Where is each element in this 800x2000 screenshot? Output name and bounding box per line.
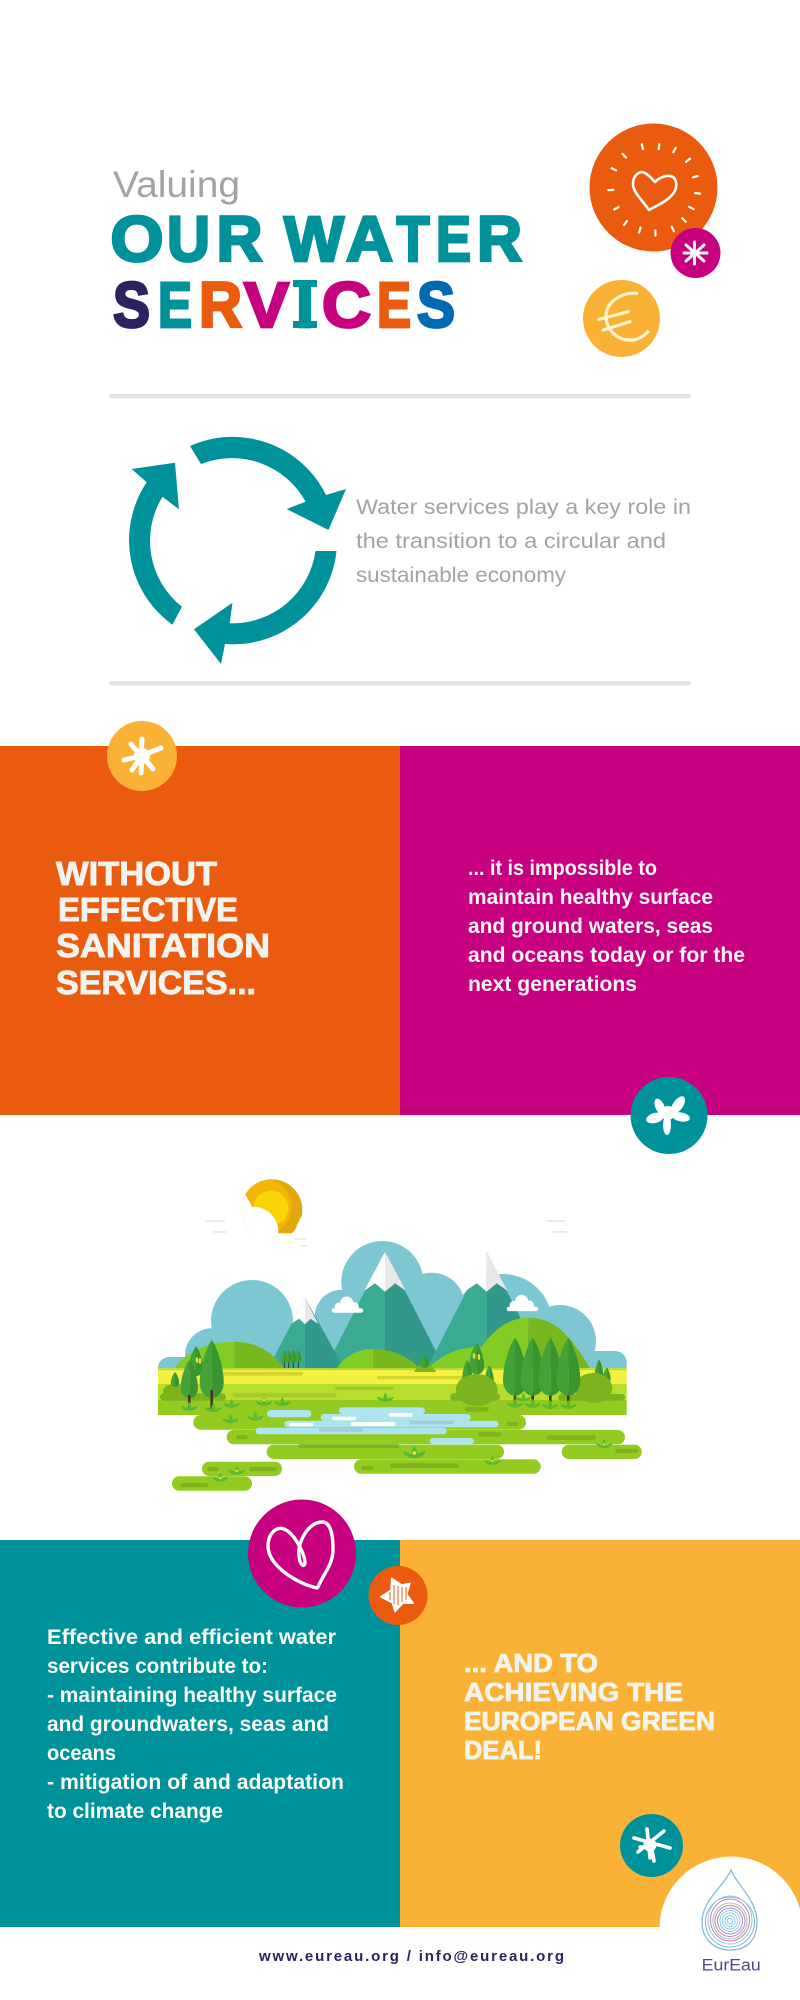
title: our water: O bbox=[110, 203, 164, 275]
heading: without effective sanitation services: SANITATION bbox=[56, 927, 270, 964]
icon: magenta heart badge bbox=[248, 1500, 356, 1608]
trees bbox=[160, 1338, 625, 1409]
heading: and to achieving the european green deal: EUROPEAN GREEN bbox=[464, 1706, 715, 1736]
text: services contribute to bbox=[47, 1626, 344, 1823]
title: our water: A bbox=[346, 203, 393, 275]
text: circular economy statement bbox=[356, 496, 691, 587]
icon: teal asterisk badge bbox=[620, 1814, 683, 1877]
title: services: E bbox=[377, 269, 411, 341]
title: services: C bbox=[322, 269, 371, 341]
panel: impossible to maintain bbox=[400, 746, 800, 1115]
heading: and to achieving the european green deal: ACHIEVING THE bbox=[464, 1677, 683, 1707]
icon: orange heart badge bbox=[590, 124, 718, 252]
title: our water: R bbox=[477, 203, 522, 275]
title: services: E bbox=[158, 269, 192, 341]
title: our water: R bbox=[216, 203, 262, 275]
text: services contribute to: services contribute to: bbox=[47, 1655, 268, 1678]
icon: magenta asterisk badge bbox=[670, 228, 720, 278]
text: impossible to maintain healthy waters: next generations bbox=[468, 973, 637, 996]
title: our water: E bbox=[436, 203, 471, 275]
water bbox=[256, 1407, 499, 1444]
text: circular economy statement: Water services play a key role in bbox=[356, 496, 691, 519]
text: impossible to maintain healthy waters: ... it is impossible to bbox=[468, 857, 657, 880]
clouds bbox=[332, 1295, 538, 1313]
icon: orange star badge bbox=[368, 1566, 428, 1625]
text: impossible to maintain healthy waters: and oceans today or for the bbox=[468, 944, 745, 967]
icon: gold asterisk badge bbox=[107, 721, 177, 791]
grass tufts bbox=[181, 1393, 612, 1482]
title: services: R bbox=[199, 269, 242, 341]
text: services contribute to: Effective and efficient water bbox=[47, 1626, 336, 1649]
icon: circular arrows bbox=[129, 437, 346, 664]
text: circular economy statement: sustainable economy bbox=[356, 564, 567, 587]
text: services contribute to: to climate change bbox=[47, 1800, 223, 1823]
title: services: S bbox=[417, 269, 455, 341]
heading: without effective sanitation services: WITHOUT bbox=[56, 855, 217, 892]
divider top bbox=[109, 394, 691, 398]
text: circular economy statement: the transition to a circular and bbox=[356, 530, 666, 553]
panel: effective services bbox=[0, 1540, 400, 1927]
text: services contribute to: oceans bbox=[47, 1742, 116, 1765]
white logo dome bbox=[660, 1856, 800, 2000]
text: services contribute to: - maintaining healthy surface bbox=[47, 1684, 337, 1707]
heading: and to achieving the european green deal: DEAL! bbox=[464, 1735, 542, 1765]
title: services: S bbox=[113, 269, 150, 341]
dark marsh strokes bbox=[180, 1407, 638, 1487]
title: Valuing: Valuing bbox=[113, 164, 240, 205]
text: impossible to maintain healthy waters: maintain healthy surface bbox=[468, 886, 713, 909]
logo wordmark: EurEau bbox=[702, 1956, 761, 1975]
heading: without effective sanitation services bbox=[56, 855, 270, 1001]
logo: EurEau drop bbox=[702, 1870, 761, 1975]
heading: without effective sanitation services: SERVICES... bbox=[56, 964, 256, 1001]
title: our water: T bbox=[396, 203, 430, 275]
title: our water: W bbox=[284, 203, 345, 275]
title: our water: U bbox=[167, 203, 210, 275]
mountains bbox=[268, 1252, 546, 1368]
heading: and to achieving the european green deal bbox=[464, 1648, 715, 1765]
panel: european green deal bbox=[400, 1540, 800, 1927]
heading: and to achieving the european green deal: ... AND TO bbox=[464, 1648, 598, 1678]
heading: without effective sanitation services: EFFECTIVE bbox=[58, 891, 238, 928]
title: services: V bbox=[244, 269, 289, 341]
logo rings bbox=[706, 1896, 754, 1947]
marsh bars bbox=[172, 1415, 642, 1491]
logo drop outline bbox=[702, 1870, 757, 1950]
ground bbox=[158, 1368, 627, 1415]
text: impossible to maintain healthy waters: and ground waters, seas bbox=[468, 915, 713, 938]
sky circles bbox=[158, 1241, 627, 1382]
text: services contribute to: - mitigation of and adaptation bbox=[47, 1771, 344, 1794]
footer contact: www.eureau.org / info@eureau.org bbox=[258, 1948, 564, 1965]
divider bottom bbox=[109, 681, 691, 685]
decor: wind dashes bbox=[206, 1220, 567, 1246]
illustration: mountain landscape bbox=[158, 1175, 642, 1491]
hills bbox=[174, 1318, 590, 1368]
text: impossible to maintain healthy waters bbox=[468, 857, 745, 996]
title bbox=[110, 164, 522, 341]
title: services: I bbox=[296, 269, 314, 341]
icon: sun bbox=[241, 1179, 302, 1237]
panel: without sanitation bbox=[0, 746, 400, 1115]
text: services contribute to: and groundwaters, seas and bbox=[47, 1713, 329, 1736]
icon: euro coin bbox=[583, 280, 660, 357]
icon: teal flower badge bbox=[630, 1077, 708, 1154]
